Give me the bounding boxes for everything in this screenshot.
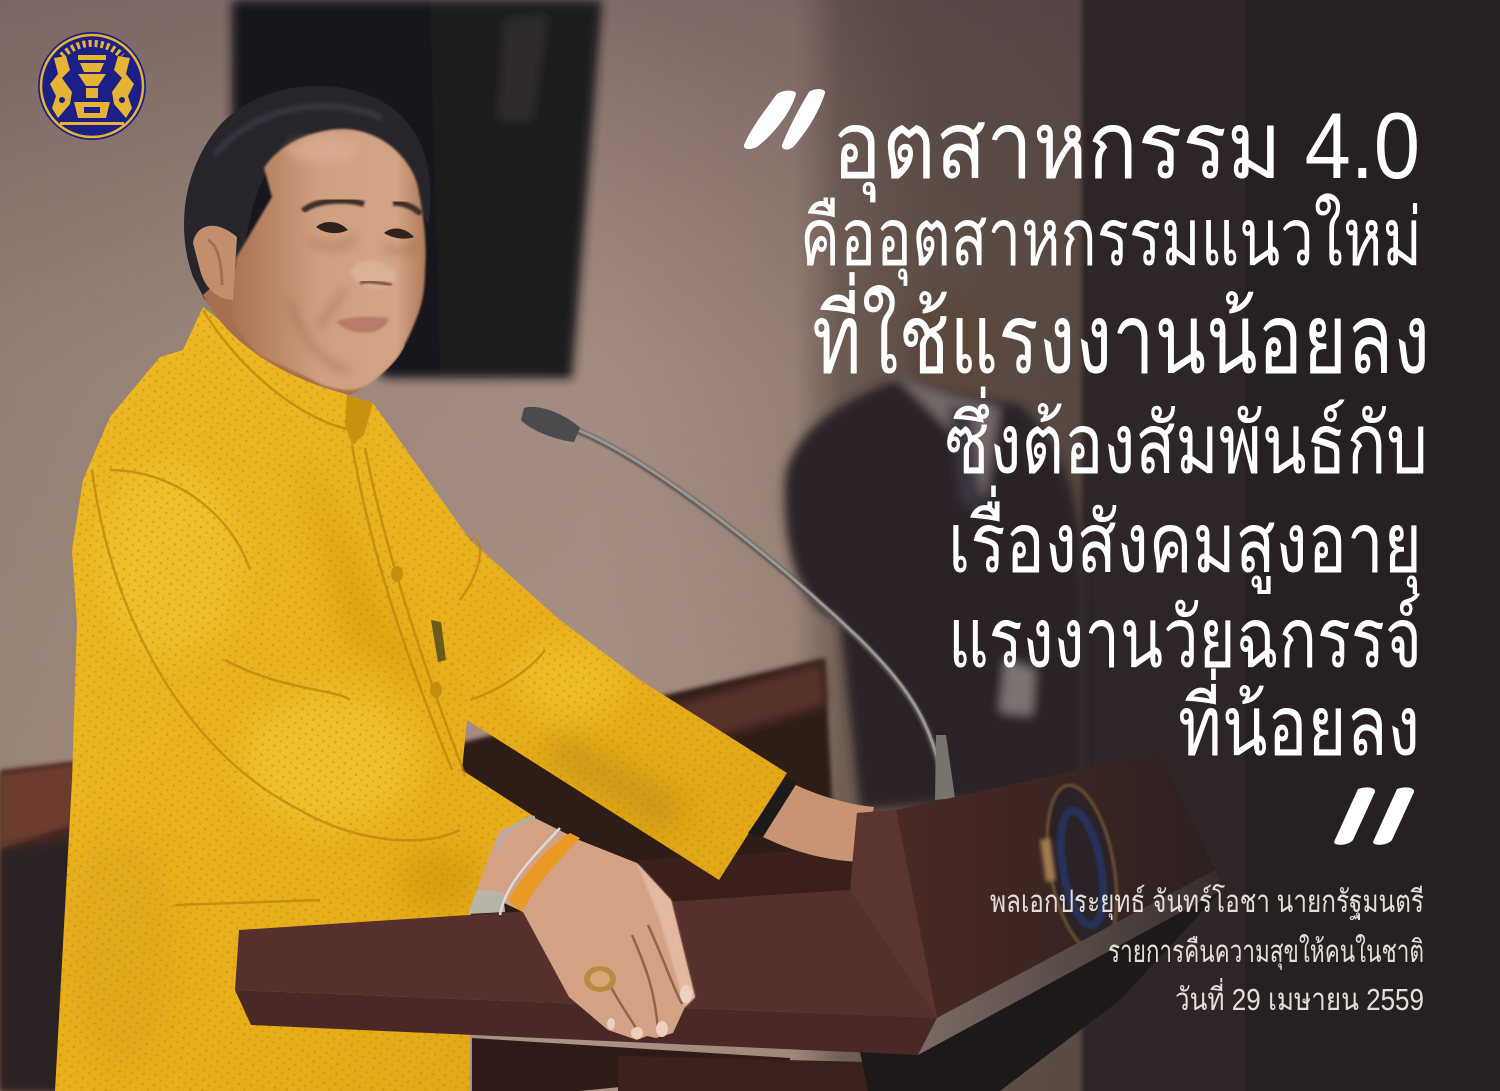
logo: government seal: [38, 32, 146, 140]
ear: [193, 226, 237, 300]
man: watch: [748, 777, 797, 837]
closing quotation mark: [1334, 787, 1414, 845]
jacket buttons: [391, 566, 403, 582]
podium base: [472, 1038, 790, 1091]
podium front top face: [235, 810, 937, 1018]
man: left hand and wristbands: [468, 817, 695, 1040]
facial shading: [290, 236, 418, 372]
nose: [350, 261, 396, 288]
fingernails: [607, 985, 692, 1039]
quote text: [800, 93, 1430, 773]
podium: [235, 752, 1222, 1091]
microphone: [521, 407, 955, 800]
podium seal and right face: [896, 752, 1215, 1018]
quote line 1: อุตสาหกรรม 4.0: [832, 93, 1420, 203]
man: hair: [184, 86, 431, 300]
ring: [584, 966, 616, 992]
quote line 7: ที่น้อยลง: [1178, 668, 1420, 773]
lapel pin: [431, 620, 446, 662]
jacket highlights and shading: [82, 469, 686, 1032]
jacket fold lines: [92, 310, 545, 905]
blurred man in background: [785, 298, 1085, 810]
opening quotation mark: [744, 89, 825, 149]
mouth: [336, 317, 389, 333]
sleeve cuff lining: [468, 890, 505, 914]
eyes: [316, 222, 348, 233]
finger separations: [610, 925, 682, 1035]
man: right hand on podium: [763, 783, 874, 862]
man: jacket: [50, 300, 810, 1091]
man: face and neck: [193, 129, 426, 395]
flame ring: [62, 43, 122, 56]
lions: [50, 56, 72, 118]
eyebrows: [303, 201, 364, 211]
collar tab: [345, 395, 373, 445]
date: วันที่ 29 เมษายน 2559: [1175, 978, 1424, 1017]
podium bevel: [918, 870, 1222, 1055]
silver bracelets: [497, 817, 535, 850]
wall-mounted screen: [232, 0, 602, 378]
attribution: [990, 884, 1424, 1017]
podium rear shelf: [637, 848, 852, 902]
orange wristband: [508, 833, 580, 912]
